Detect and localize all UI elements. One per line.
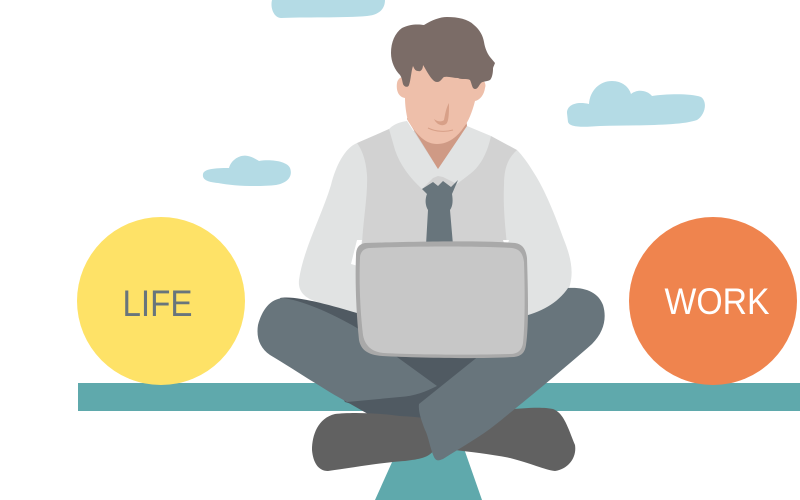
right foot (455, 408, 575, 471)
label: life: LIFE (122, 283, 192, 324)
cloud: top (271, 0, 385, 18)
label: work: WORK (664, 281, 770, 322)
laptop frame (356, 241, 528, 358)
left thigh (258, 298, 437, 402)
left foot (312, 413, 435, 471)
hair (391, 17, 495, 89)
work ball (629, 217, 797, 385)
mouth (428, 128, 453, 131)
arm gaps (351, 240, 509, 266)
laptop (356, 241, 528, 358)
laptop lid (360, 246, 525, 355)
face and ears (397, 58, 485, 144)
balance beam (78, 383, 800, 411)
cloud: left (203, 156, 291, 186)
neck (407, 110, 467, 169)
shadow under legs (347, 386, 445, 425)
tie (422, 180, 458, 245)
collar (389, 121, 491, 189)
right thigh (419, 288, 605, 460)
balance fulcrum (375, 380, 482, 500)
vest (357, 129, 517, 245)
back leg shadow (280, 297, 480, 420)
shirt arms (299, 143, 572, 318)
person (258, 17, 605, 471)
nose (434, 103, 449, 125)
cloud: right (567, 81, 705, 127)
life ball (77, 217, 245, 385)
